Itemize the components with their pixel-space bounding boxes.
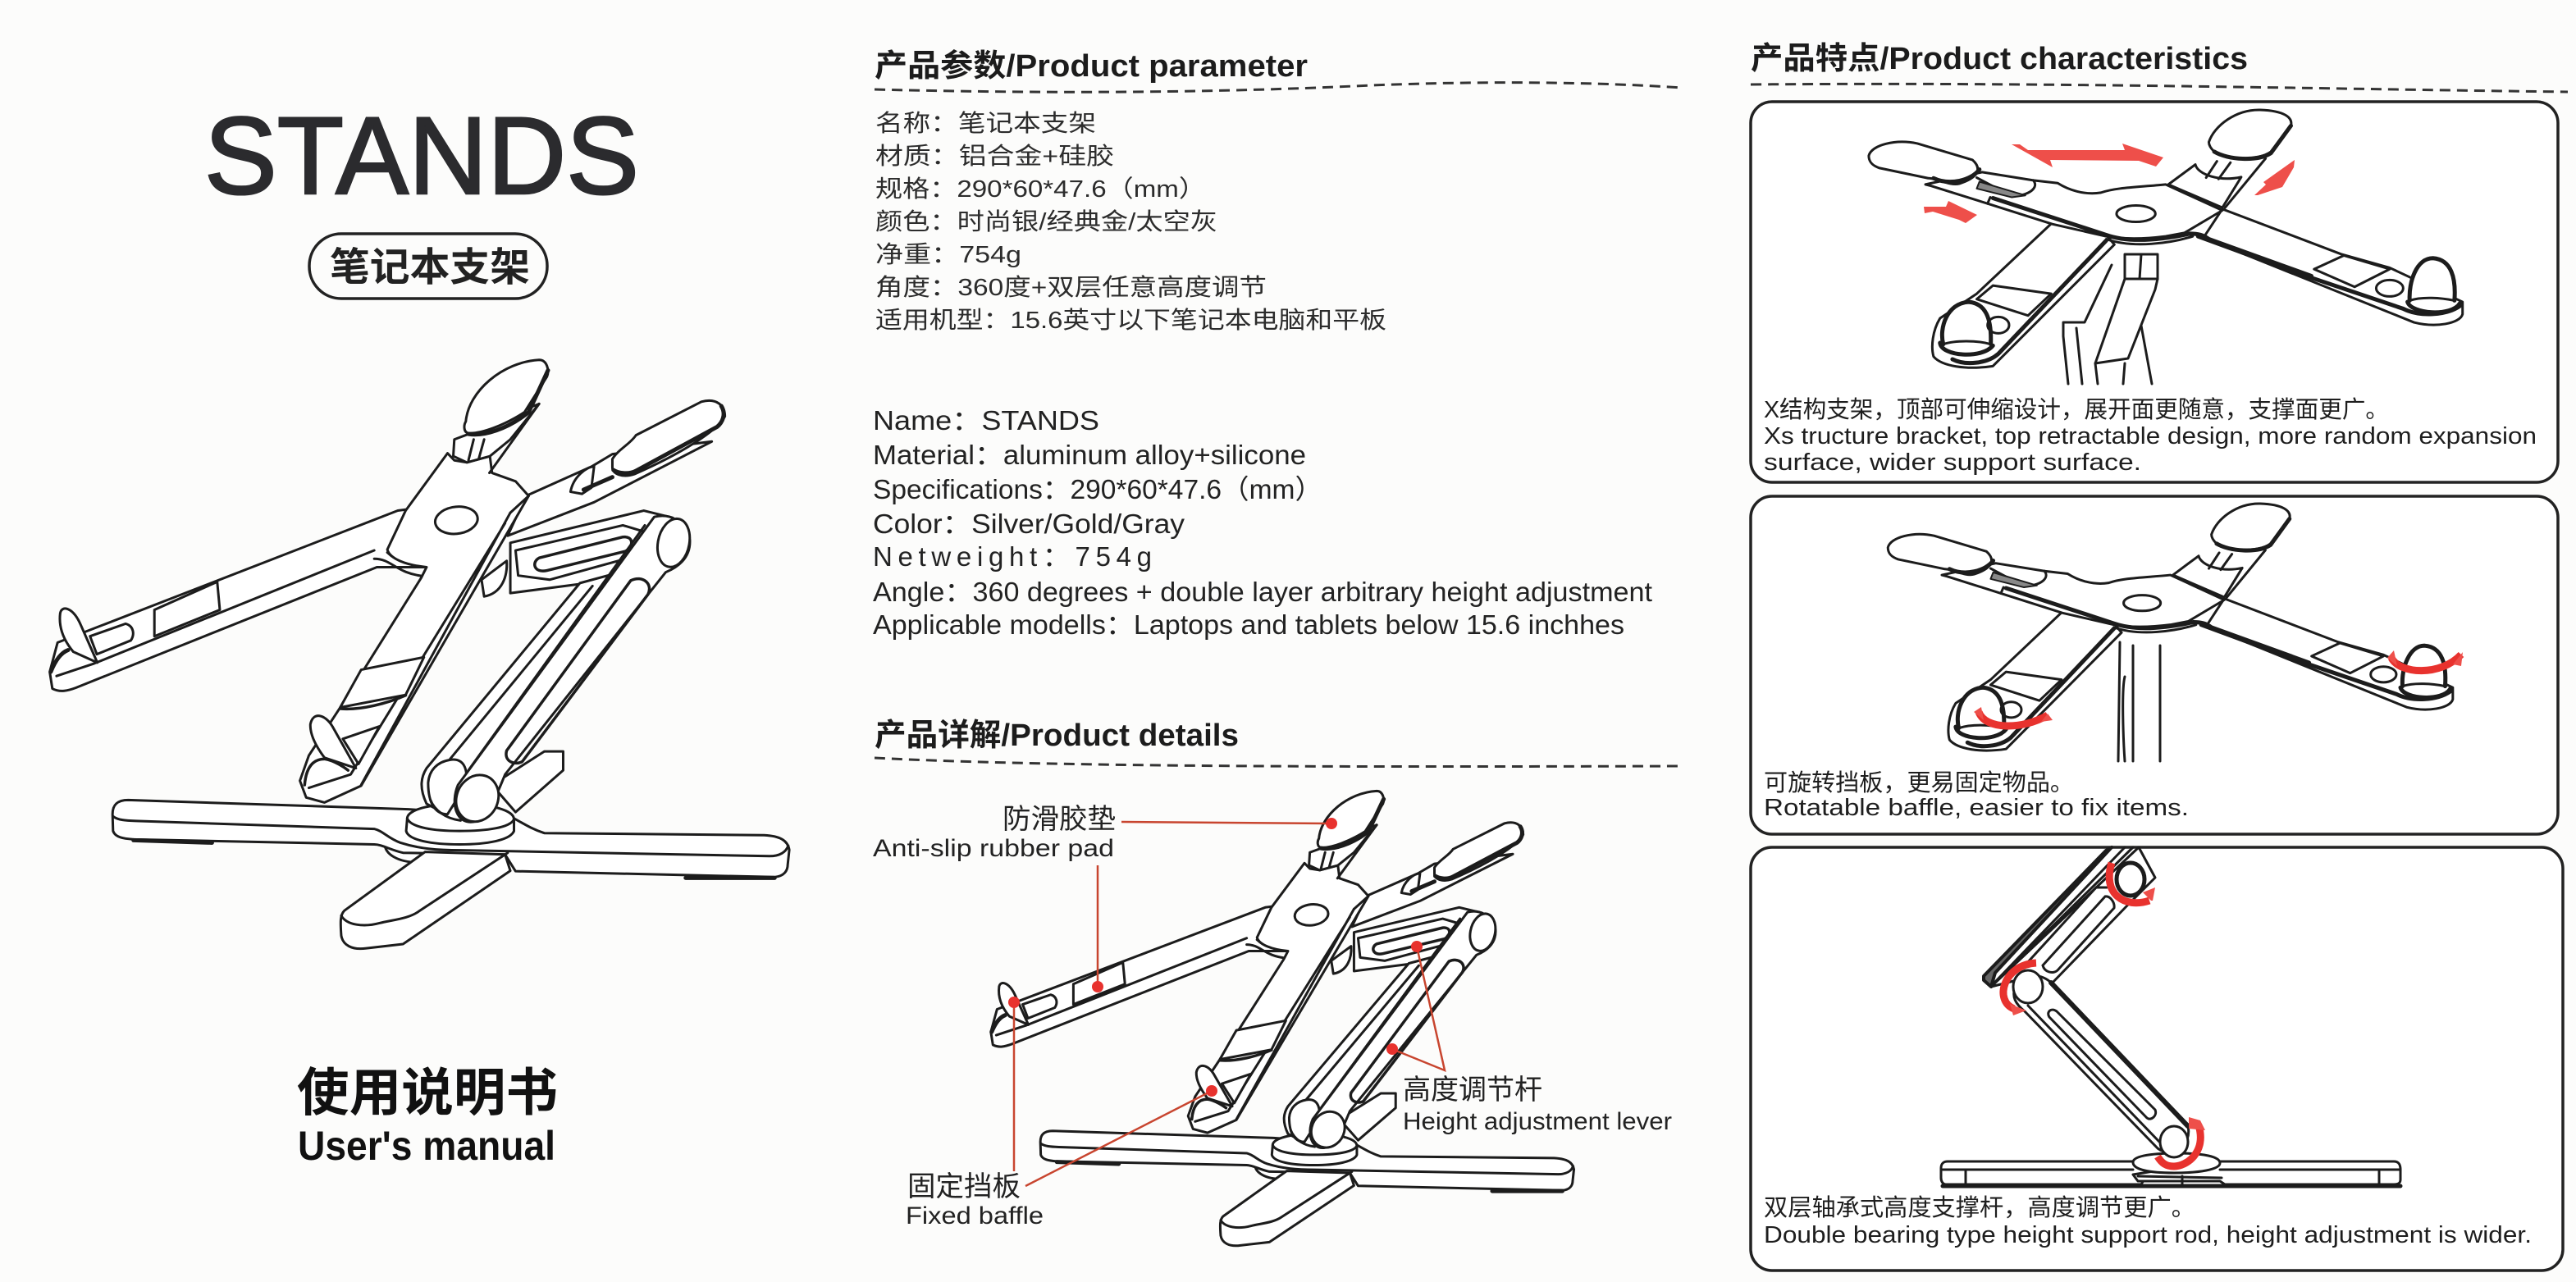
- label: anti-slip rubber pad: Anti-slip rubber pad: [873, 835, 1114, 862]
- badge: laptop stand: [309, 234, 547, 299]
- text block: Chinese specifications: 颜色：时尚银/经典金/太空灰: [875, 208, 1217, 235]
- caption: X structure bracket: X结构支架，顶部可伸缩设计，展开面更随意，支撑面更广。: [1764, 396, 2389, 423]
- panel: rotatable baffle: [1751, 496, 2558, 834]
- text block: Chinese specifications: 角度：360度+双层任意高度调节: [875, 274, 1267, 301]
- heading: product characteristics: 产品特点/Product characteristics: [1751, 42, 2248, 76]
- illustration: laptop stand product: [50, 360, 789, 949]
- caption: double bearing rod: Double bearing type height support rod, height adjustment is wider.: [1764, 1222, 2532, 1248]
- caption: X structure bracket: [1764, 396, 2537, 476]
- text block: Chinese specifications: [875, 110, 1386, 334]
- caption: rotatable baffle: Rotatable baffle, easier to fix items.: [1764, 795, 2189, 821]
- label: height adjustment lever: Height adjustment lever: [1403, 1108, 1672, 1135]
- text block: English specifications: Applicable modells：Laptops and tablets below 15.6 inchhes: [873, 609, 1624, 640]
- title: STANDS: STANDS: [204, 95, 639, 217]
- caption: X structure bracket: surface, wider support surface.: [1764, 449, 2141, 476]
- panel: product parameters: [873, 49, 1682, 640]
- label: height adjustment lever: [1403, 1074, 1672, 1135]
- illustration: side view of height rods: [1941, 847, 2400, 1186]
- arrows: retractable directions: [1924, 144, 2295, 223]
- text block: Chinese specifications: 材质：铝合金+硅胶: [875, 143, 1114, 170]
- label: fixed baffle: [906, 1171, 1044, 1230]
- caption: rotatable baffle: 可旋转挡板，更易固定物品。: [1764, 769, 2074, 796]
- text block: English specifications: Color：Silver/Gold/Gray: [873, 509, 1185, 539]
- heading: user manual English: User's manual: [298, 1123, 555, 1169]
- label: fixed baffle: Fixed baffle: [906, 1202, 1044, 1230]
- callout leaders: rubber pad: [1092, 818, 1337, 992]
- panel: double bearing support rod: [1751, 847, 2563, 1271]
- text block: English specifications: Angle：360 degrees + double layer arbitrary height adjustment: [873, 577, 1652, 607]
- callout leaders: fixed baffle: [1008, 997, 1217, 1186]
- label: fixed baffle: 固定挡板: [907, 1171, 1021, 1202]
- text block: English specifications: [873, 405, 1652, 640]
- text block: English specifications: Netweight：754g: [873, 541, 1152, 572]
- text block: Chinese specifications: 净重：754g: [875, 241, 1021, 268]
- text block: Chinese specifications: 适用机型：15.6英寸以下笔记本电脑和平板: [875, 307, 1386, 334]
- panel: X structure bracket: [1751, 102, 2558, 482]
- arrows: baffle rotation: [1979, 655, 2461, 726]
- text block: English specifications: Material：aluminum alloy+silicone: [873, 440, 1306, 470]
- illustration: X bracket with arrows: [1869, 110, 2463, 384]
- illustration: X bracket with rotation arrows: [1888, 504, 2463, 761]
- text block: English specifications: Name：STANDS: [873, 405, 1099, 436]
- label: anti-slip rubber pad: [873, 804, 1116, 862]
- badge: laptop stand: 笔记本支架: [330, 246, 530, 290]
- text block: Chinese specifications: 规格：290*60*47.6（mm）: [875, 176, 1206, 203]
- panel: product details: [873, 719, 1682, 1246]
- text block: Chinese specifications: 名称：笔记本支架: [875, 110, 1096, 137]
- heading: user manual Chinese: 使用说明书: [297, 1065, 558, 1122]
- label: height adjustment lever: 高度调节杆: [1403, 1074, 1542, 1106]
- caption: rotatable baffle: [1764, 769, 2189, 821]
- text block: English specifications: Specifications：290*60*47.6（mm）: [873, 474, 1322, 504]
- heading: product parameter: 产品参数/Product parameter: [875, 49, 1308, 84]
- callout leaders: height lever: [1386, 941, 1445, 1070]
- arrows: rotation at three joints: [2003, 863, 2200, 1166]
- diagram: labelled stand: [991, 791, 1574, 1246]
- caption: double bearing rod: 双层轴承式高度支撑杆，高度调节更广。: [1764, 1194, 2195, 1221]
- panel: manual cover: [50, 95, 789, 1169]
- label: anti-slip rubber pad: 防滑胶垫: [1003, 804, 1116, 835]
- heading: product details: 产品详解/Product details: [875, 719, 1239, 753]
- caption: double bearing rod: [1764, 1194, 2532, 1248]
- caption: X structure bracket: Xs tructure bracket, top retractable design, more random expansion: [1764, 423, 2537, 449]
